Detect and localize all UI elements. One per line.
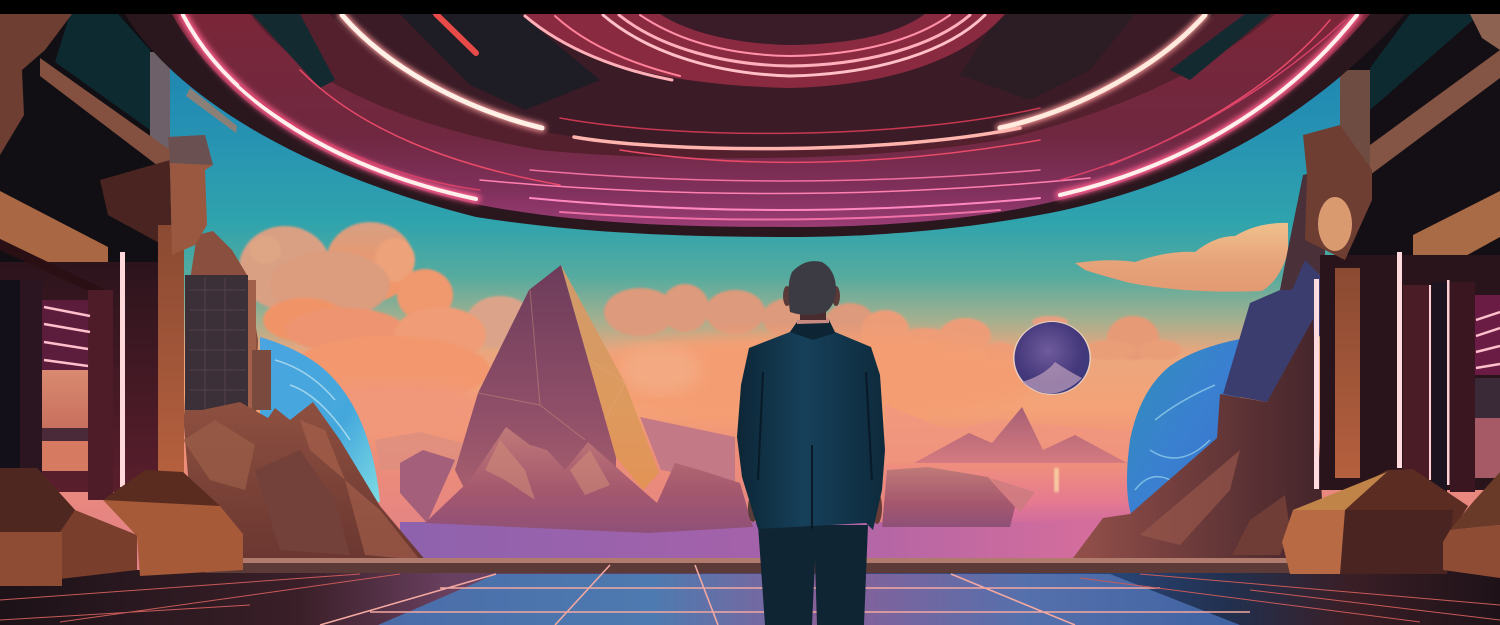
floor xyxy=(0,558,1500,625)
copper pilaster xyxy=(158,225,184,475)
right cliff top xyxy=(1280,170,1325,290)
capital xyxy=(168,135,213,255)
hands xyxy=(748,494,758,522)
central crimson rings xyxy=(525,14,1005,88)
man from behind xyxy=(737,261,885,625)
blue planet right xyxy=(1127,339,1240,520)
upper diagonal brace xyxy=(0,14,72,155)
copper panel xyxy=(1413,191,1500,285)
far sea xyxy=(885,463,1135,533)
top corner brace xyxy=(1470,0,1500,50)
right rock cluster xyxy=(1073,319,1325,560)
left rock cluster xyxy=(183,402,427,565)
upper pillar xyxy=(1340,70,1370,170)
diagonal beam xyxy=(40,58,170,175)
blue planet left xyxy=(260,337,380,502)
right plinths xyxy=(1282,469,1500,578)
left plinths xyxy=(0,468,243,586)
right blue tower xyxy=(1223,179,1325,402)
teal patches xyxy=(252,14,1270,88)
collar xyxy=(790,317,835,340)
distant mountains xyxy=(375,405,1130,483)
window xyxy=(42,300,88,370)
copper panel xyxy=(0,191,108,291)
foreground mid rocks xyxy=(400,427,1035,533)
dark scrolled header xyxy=(100,160,172,250)
ring ship overhead xyxy=(125,14,1405,237)
dark left bays xyxy=(0,280,20,480)
jacket xyxy=(737,320,885,530)
right cloud xyxy=(1075,223,1288,292)
diagonal beam xyxy=(1370,50,1500,175)
rim xyxy=(125,14,1405,237)
top letterbox bar xyxy=(0,0,1500,14)
grey pillar xyxy=(150,52,170,160)
neon strips left xyxy=(44,252,125,487)
right structure xyxy=(1303,0,1500,492)
right window xyxy=(1475,295,1500,375)
teal recess xyxy=(55,14,150,130)
hair xyxy=(788,261,836,315)
teal recess xyxy=(1370,14,1480,110)
capital xyxy=(1303,125,1372,260)
bridge rail xyxy=(205,558,1290,563)
left cloud xyxy=(239,222,495,438)
legs xyxy=(758,525,868,625)
sun reflection xyxy=(1054,468,1059,492)
central cloud bank xyxy=(466,284,1182,423)
neon strips right xyxy=(1314,252,1500,489)
ears xyxy=(783,286,791,306)
shirt collar xyxy=(797,318,829,324)
tiles xyxy=(378,574,1240,625)
near sea xyxy=(400,522,1140,564)
neck xyxy=(800,300,826,320)
left structure xyxy=(0,14,213,500)
small planet xyxy=(1013,321,1091,395)
neon rings xyxy=(183,14,1357,220)
dark mesh ring xyxy=(330,14,1215,147)
inner deck xyxy=(250,14,1275,158)
pyramid xyxy=(455,265,659,500)
copper pilaster xyxy=(1335,268,1360,478)
left strut xyxy=(186,88,237,133)
hull xyxy=(172,14,1370,227)
left rock pillar and towers xyxy=(184,231,271,420)
